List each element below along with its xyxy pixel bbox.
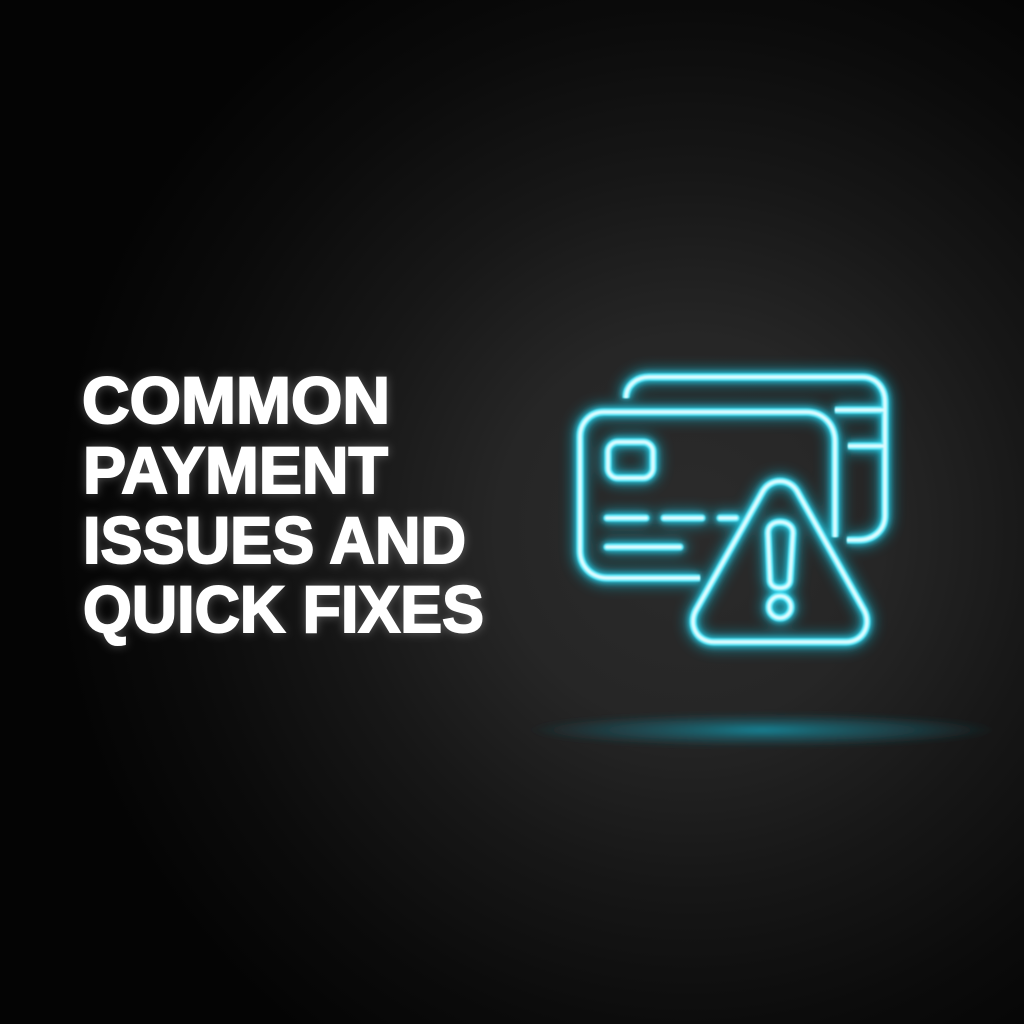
title: COMMON [82, 363, 390, 437]
icon: neon credit cards with warning triangle [580, 377, 885, 642]
title: ISSUES AND [83, 503, 466, 577]
title: PAYMENT [83, 433, 388, 507]
floor glow [527, 713, 997, 747]
title: ISSUES AND [83, 503, 466, 577]
title: QUICK FIXES [83, 572, 484, 646]
title: COMMON [82, 363, 390, 437]
title: PAYMENT [83, 433, 388, 507]
title: QUICK FIXES [83, 572, 484, 646]
title [82, 363, 484, 646]
